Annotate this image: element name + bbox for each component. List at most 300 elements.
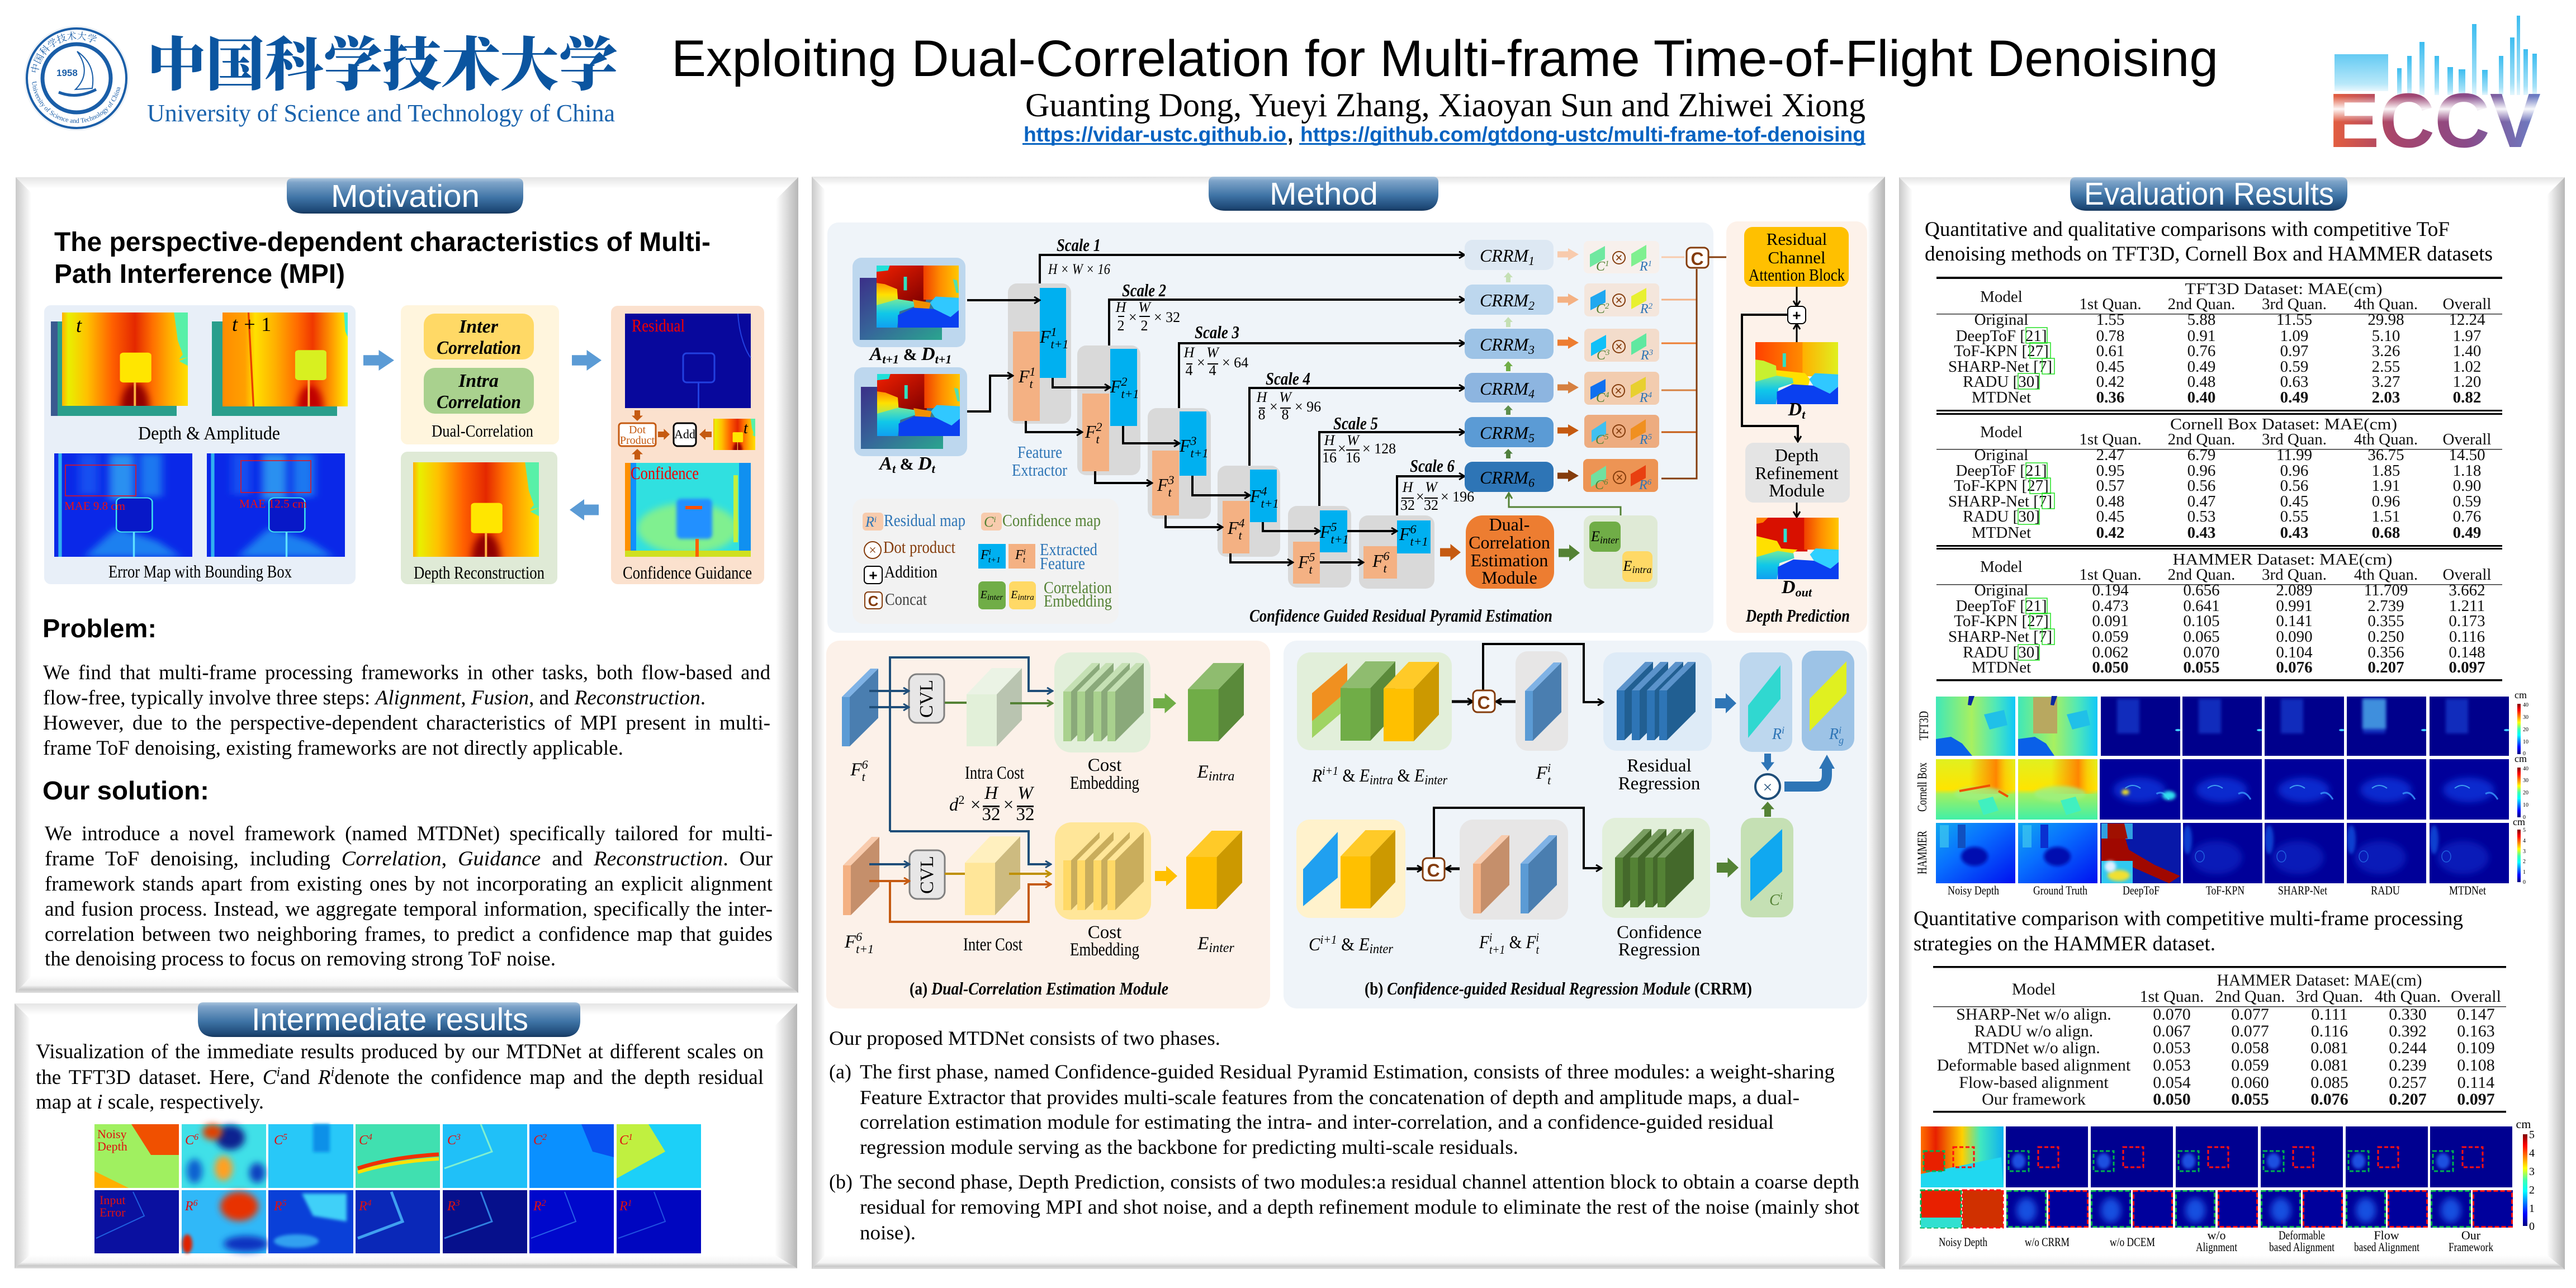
icon: university seal: 1958 [56, 68, 78, 78]
module labels: 6 [856, 930, 862, 944]
module labels [844, 755, 1234, 960]
heading: MPI: Path Interference (MPI) [54, 259, 345, 289]
module labels: t+1 [856, 942, 874, 956]
colorbars: 40 [2523, 702, 2528, 708]
map: noisy depth [94, 1124, 179, 1188]
confidence times residual maps: × [1615, 424, 1623, 439]
table: TFT3D: 1.97 [2453, 327, 2481, 345]
feature extractor pyramid: 5 [1309, 550, 1315, 564]
CRRM labels: F [1479, 932, 1490, 953]
sub-panel: dual-correlation [401, 305, 559, 444]
legend: Addition [884, 562, 937, 581]
table: Cornell Box: 14.50 [2449, 446, 2485, 464]
dimension labels: × 128 [1362, 441, 1396, 457]
input: frame t: t [892, 462, 896, 476]
legend: + [869, 567, 878, 584]
table: Cornell Box: Overall [2443, 430, 2491, 448]
dimension labels: W [1347, 432, 1360, 448]
table: HAMMER: 0.091 [2092, 612, 2129, 630]
arrow: curved to R_g [1784, 755, 1835, 787]
CRRM labels: i [1782, 724, 1784, 736]
map: C1 [617, 1124, 701, 1188]
map: R1 [617, 1190, 701, 1253]
map: noisy depth: Depth [97, 1139, 127, 1153]
legend: Dot product [883, 537, 955, 557]
feature extractor pyramid: 6 [1410, 522, 1417, 536]
map: C1: 1 [628, 1133, 633, 1142]
table: multi-frame strategies: Flow-based alignment [1959, 1073, 2109, 1092]
table: multi-frame strategies: 0.070 [2153, 1005, 2191, 1024]
inter branch [843, 831, 1242, 915]
module labels: Cost [1088, 755, 1121, 775]
map: C6: C [185, 1133, 194, 1148]
correlation embeddings [1509, 493, 1658, 589]
confidence times residual maps: C [1595, 433, 1604, 447]
table: Cornell Box: 0.48 [2096, 493, 2124, 510]
text block: evaluation intro: Quantitative and qualitative comparisons with competitive ToF [1925, 218, 2450, 241]
map: R5 [268, 1190, 353, 1253]
colorbar: 0 [2529, 1220, 2535, 1233]
CRRM labels [1309, 724, 1844, 960]
table: Cornell Box: 0.55 [2280, 508, 2308, 525]
table: TFT3D: RADU [30] [1963, 373, 2040, 391]
table: HAMMER: Overall [2443, 566, 2491, 584]
table: HAMMER: 2.739 [2367, 597, 2404, 615]
module connections [869, 657, 1053, 922]
module labels: × [965, 795, 982, 815]
labels: Noisy Depth [1939, 1235, 1987, 1249]
table: Cornell Box: 0.96 [2187, 462, 2215, 480]
table: HAMMER: 2.089 [2276, 581, 2313, 599]
map: C4 [356, 1124, 440, 1188]
feature extractor pyramid: F [1019, 366, 1030, 386]
dimension labels: 8 [1281, 406, 1289, 423]
sub-panel: confidence guidance: Confidence Guidance [623, 562, 752, 583]
scale labels: Scale 3 [1195, 322, 1239, 342]
residual branch blocks [1312, 661, 1846, 741]
table: multi-frame strategies: 0.085 [2310, 1073, 2348, 1092]
text block: problem: frame ToF denoising, existing frameworks are not directly applicable. [43, 737, 623, 760]
CRRM labels: i+1 [1322, 764, 1338, 778]
confidence times residual maps: 4 [1605, 391, 1609, 400]
logo: English university name: University of Science and Technology of China [147, 100, 615, 127]
sub-panel: dual-correlation: Inter [458, 316, 499, 337]
table: Cornell Box: MTDNet [1972, 524, 2031, 542]
input: frame t [854, 367, 967, 476]
table: multi-frame strategies: 0.081 [2310, 1056, 2348, 1074]
residual channel attention block: Channel [1768, 248, 1826, 267]
table: Cornell Box: 0.43 [2187, 524, 2215, 542]
depth refinement module: Module [1769, 480, 1825, 500]
feature extractor pyramid: 3 [1168, 473, 1175, 487]
table: Cornell Box: 0.76 [2453, 508, 2481, 525]
text block: intermediate description: map at i scale, respectively. [36, 1091, 264, 1114]
table: multi-frame strategies: 2nd Quan. [2215, 987, 2285, 1006]
table: HAMMER: ToF-KPN [27] [1954, 612, 2049, 630]
confidence times residual maps: 6 [1604, 478, 1608, 487]
CRRM stack: 1 [1528, 254, 1535, 268]
map: C1: C [619, 1133, 628, 1148]
correlation embeddings: E [1591, 528, 1600, 544]
text block: method description: residual for removing MPI and shot noise, and a depth refinement module to eliminate the rest of the noise (mainly shot [860, 1196, 1859, 1218]
dimension labels: W [1279, 389, 1292, 405]
module labels: Cost [1088, 922, 1121, 943]
text block: method description: (b) [829, 1171, 853, 1193]
legend: intra [1018, 593, 1034, 602]
module labels: Embedding [1070, 773, 1139, 793]
feature extractor pyramid: 1 [1030, 364, 1036, 378]
row: HAMMER [1915, 823, 2509, 883]
labels: based Alignment [2269, 1240, 2334, 1254]
table: HAMMER: 0.148 [2449, 643, 2485, 661]
module labels: 32 [982, 804, 1001, 825]
feature extractor pyramid: t+1 [1191, 446, 1209, 460]
confidence times residual maps: × [1615, 251, 1623, 266]
arrow [1559, 544, 1580, 561]
arrow [363, 350, 394, 371]
heading: problem: Problem: [42, 614, 157, 643]
sub-panel: dual-correlation: Correlation [437, 338, 521, 358]
text block: solution: and fusion process. Instead, we aggregate temporal information, specifically the inter- [45, 898, 773, 921]
arrow [1717, 858, 1739, 878]
table: Cornell Box: 1.18 [2453, 462, 2481, 480]
feature extractor pyramid: F [1157, 475, 1168, 495]
table: Cornell Box: 4th Quan. [2354, 430, 2418, 448]
correlation embeddings: E [1623, 558, 1632, 574]
map: R6: R [185, 1199, 193, 1214]
table: HAMMER: 0.207 [2367, 659, 2404, 676]
confidence times residual maps [1583, 241, 1659, 493]
column labels: SHARP-Net [2278, 883, 2327, 897]
table: multi-frame strategies: RADU w/o align. [1974, 1022, 2093, 1040]
map: R4: 4 [367, 1199, 372, 1208]
table: Cornell Box: 0.47 [2187, 493, 2215, 510]
legend: × [869, 543, 877, 558]
table: TFT3D: 29.98 [2367, 311, 2404, 329]
input: frame t+1: A [870, 344, 882, 364]
scale labels: Scale 5 [1333, 413, 1378, 433]
table: Cornell Box: Model [1980, 423, 2023, 441]
map: R6 [182, 1190, 268, 1253]
table: multi-frame strategies: 0.111 [2311, 1005, 2348, 1024]
table: TFT3D: 11.55 [2276, 311, 2312, 329]
table: HAMMER: 0.656 [2183, 581, 2220, 599]
feature extractor pyramid: Extractor [1012, 460, 1068, 480]
confidence times residual maps: 3 [1649, 348, 1653, 357]
figure: qualitative comparisons [1915, 689, 2528, 897]
arrow [1155, 866, 1177, 886]
figure: alignment comparison [1921, 1117, 2535, 1254]
CRRM labels: & [1338, 766, 1360, 786]
table: Cornell Box: 1.85 [2372, 462, 2400, 480]
table: multi-frame strategies: 0.053 [2153, 1039, 2191, 1057]
panel: evaluation results [1899, 176, 2565, 1270]
map: R5: 5 [282, 1199, 287, 1208]
dimension labels: 16 [1346, 449, 1360, 466]
table: TFT3D: 0.61 [2096, 342, 2124, 360]
table: HAMMER: 0.355 [2367, 612, 2404, 630]
confidence times residual maps: 3 [1605, 348, 1610, 357]
dimension labels: W [1425, 479, 1438, 495]
feature extractor pyramid: F [1372, 551, 1384, 571]
dimension labels: × [1338, 441, 1346, 457]
table: TFT3D: Overall [2443, 295, 2491, 313]
feature extractor pyramid: 3 [1190, 434, 1197, 448]
colorbars: 0 [2523, 815, 2526, 821]
figure: multi-scale maps [94, 1124, 701, 1253]
CRRM labels: i [1547, 761, 1551, 775]
table: HAMMER: 0.062 [2092, 643, 2129, 661]
map: noisy depth: Noisy [97, 1127, 127, 1141]
dimension labels: H [1324, 432, 1336, 448]
legend: C [984, 514, 993, 530]
table: HAMMER: 0.090 [2276, 628, 2313, 646]
map: C4: 4 [368, 1133, 372, 1142]
table: HAMMER: 0.070 [2183, 643, 2220, 661]
feature extractor pyramid: 1 [1051, 325, 1057, 339]
table: HAMMER: 0.116 [2449, 628, 2485, 646]
table: multi-frame strategies: 0.114 [2457, 1073, 2494, 1092]
confidence times residual maps: 1 [1648, 259, 1652, 268]
confidence times residual maps: R [1640, 302, 1649, 316]
table: TFT3D: 0.76 [2187, 342, 2215, 360]
table: TFT3D: 0.82 [2453, 389, 2481, 406]
table: TFT3D: 1.40 [2453, 342, 2481, 360]
dimension labels: × 196 [1441, 489, 1474, 505]
module labels: d [949, 795, 958, 815]
CRRM labels: R [1772, 726, 1782, 743]
module labels: E [1197, 762, 1209, 782]
table: multi-frame strategies: Deformable based alignment [1937, 1056, 2131, 1074]
feature extractor pyramid: t+1 [1121, 387, 1139, 401]
row: HAMMER: HAMMER [1915, 831, 1929, 874]
column labels: RADU [2371, 883, 2400, 897]
table: multi-frame strategies: SHARP-Net w/o align. [1956, 1005, 2111, 1024]
table: HAMMER: 1st Quan. [2079, 566, 2142, 584]
dimension labels: H [1402, 479, 1414, 495]
map: R2: 2 [542, 1199, 546, 1208]
sub-panel: confidence guidance [611, 306, 764, 584]
dimension labels: × 32 [1154, 309, 1180, 325]
map: input error: Error [100, 1205, 126, 1219]
map: R1: R [619, 1199, 628, 1214]
panel frame [1899, 177, 2565, 1270]
arrow [572, 350, 602, 371]
dimension labels: 8 [1258, 406, 1266, 423]
table: TFT3D: 0.36 [2096, 389, 2124, 406]
text block: intermediate description: denote the confidence map and the depth residual [334, 1066, 764, 1089]
feature extractor pyramid: Feature [1017, 442, 1062, 462]
CRRM labels: Residual [1627, 756, 1692, 776]
feature extractor pyramid: t [1096, 432, 1100, 446]
map: C5: C [274, 1133, 283, 1148]
colorbars: 20 [2523, 790, 2528, 796]
depth refinement module [1745, 443, 1850, 503]
dimension labels: 32 [1400, 497, 1415, 513]
sub-panel: confidence guidance: Product [620, 434, 655, 447]
table: TFT3D: 0.78 [2096, 327, 2124, 345]
map: R1: 1 [628, 1199, 632, 1208]
colorbars: 4 [2523, 838, 2526, 844]
colorbars: 10 [2523, 739, 2528, 745]
label: D_out: out [1796, 585, 1812, 599]
scale labels: Scale 1 [1057, 235, 1101, 255]
heading pill: Motivation: Motivation [331, 178, 480, 214]
links: , [1287, 123, 1293, 146]
table: Cornell Box: 0.53 [2187, 508, 2215, 525]
authors: Guanting Dong, Yueyi Zhang, Xiaoyan Sun and Zhiwei Xiong [1025, 87, 1865, 124]
labels: Framework [2449, 1240, 2493, 1254]
image: noisy depth with boxes [1921, 1126, 2004, 1187]
arrow [1761, 754, 1774, 771]
colorbar: cm [2516, 1117, 2531, 1131]
module labels: H [984, 783, 999, 803]
CRRM labels: g [1839, 735, 1844, 746]
concat arrows [1661, 257, 1744, 479]
table: Cornell Box: 0.49 [2453, 524, 2481, 542]
table: Cornell Box: Original [1974, 446, 2028, 464]
table: HAMMER: 0.991 [2276, 597, 2313, 615]
table: HAMMER: 0.173 [2449, 612, 2485, 630]
table: TFT3D: SHARP-Net [7] [1948, 358, 2052, 376]
label: D_t: D [1788, 399, 1802, 420]
table: HAMMER: SHARP-Net [7] [1948, 628, 2052, 646]
table: Cornell Box: 1st Quan. [2079, 430, 2142, 448]
legend: R [865, 514, 874, 530]
table: multi-frame strategies: Overall [2451, 987, 2501, 1006]
table: HAMMER: Original [1974, 581, 2028, 599]
confidence times residual maps: 2 [1649, 302, 1653, 311]
confidence times residual maps: 5 [1604, 433, 1609, 442]
table: HAMMER: 4th Quan. [2354, 566, 2418, 584]
text block: intermediate description: i [331, 1065, 334, 1079]
column labels: MTDNet [2449, 883, 2486, 897]
input: frame t+1 [853, 258, 965, 366]
legend: Embedding [1044, 591, 1112, 610]
arrow [1153, 693, 1176, 713]
dimension labels: 4 [1185, 362, 1193, 378]
CRRM labels: & [1393, 766, 1414, 786]
logo: Chinese university name: 中国科学技术大学 [147, 18, 618, 102]
dimension labels: × [1270, 399, 1278, 415]
heading pill: evaluation results: Evaluation Results [2084, 176, 2334, 212]
column labels: ToF-KPN [2206, 883, 2244, 897]
scale arrows [967, 255, 1465, 562]
feature extractor pyramid [1008, 283, 1434, 589]
CRRM stack: 4 [1528, 387, 1535, 401]
feature extractor pyramid: t [1384, 561, 1388, 575]
column labels: Ground Truth [2033, 883, 2087, 897]
icon: university seal [24, 26, 129, 131]
confidence times residual maps: × [1616, 471, 1623, 485]
table: TFT3D: ToF-KPN [27] [1954, 342, 2049, 360]
feature extractor pyramid: 4 [1239, 516, 1245, 530]
icon: university seal: 中国科学技术大学 [30, 31, 97, 73]
table: HAMMER: 0.194 [2092, 581, 2129, 599]
table: Cornell Box: 2.47 [2096, 446, 2124, 464]
map: R3: R [447, 1199, 456, 1214]
text block: problem: flow-free, typically involve three steps: Alignment, Fusion, and Reconstruction. [43, 686, 705, 709]
colorbars: 2 [2523, 859, 2526, 865]
table: multi-frame strategies: 0.077 [2231, 1022, 2269, 1040]
table: TFT3D: 3rd Quan. [2262, 295, 2327, 313]
caption (a): (a) Dual-Correlation Estimation Module [910, 978, 1168, 998]
labels: Our [2461, 1228, 2481, 1242]
dual-correlation estimation module: Module [1481, 567, 1537, 588]
text block: multi-frame comparison: strategies on the HAMMER dataset. [1914, 932, 2215, 955]
dimension labels: H × W × 16 [1048, 261, 1110, 277]
sub-panel: depth and amplitude, error map: MAE 12.5 cm [239, 497, 307, 510]
text block: intermediate description [36, 1040, 764, 1114]
CRRM labels: E [1359, 935, 1370, 955]
dimension labels [1048, 261, 1474, 513]
feature extractor pyramid: F [1228, 518, 1239, 538]
CRRM labels: & [1337, 935, 1359, 955]
table: multi-frame strategies: 0.116 [2311, 1022, 2348, 1040]
table: multi-frame strategies: 0.163 [2457, 1022, 2495, 1040]
table: multi-frame strategies: 0.109 [2457, 1039, 2495, 1057]
confidence times residual maps: C [1596, 302, 1605, 316]
sub-panel: dual-correlation: Dual-Correlation [432, 421, 533, 441]
map: R2: R [533, 1199, 542, 1214]
table: HAMMER: 11.709 [2364, 581, 2408, 599]
panel frame [812, 177, 1885, 1269]
confidence times residual maps: C [1596, 259, 1605, 274]
confidence branch blocks [1303, 829, 1782, 913]
map: C3: 3 [456, 1133, 461, 1142]
diagram: confidence guided residual pyramid estimation [827, 222, 1744, 633]
table: TFT3D [1936, 277, 2502, 415]
module labels: E [1197, 934, 1209, 954]
module labels: Embedding [1070, 940, 1139, 960]
caption: depth prediction: Depth Prediction [1745, 605, 1850, 626]
CRRM stack: CRRM [1480, 334, 1528, 354]
table: multi-frame strategies: 0.055 [2231, 1090, 2269, 1109]
dimension labels: × [1129, 309, 1137, 325]
colorbars [2513, 689, 2528, 886]
module labels: W [1017, 783, 1034, 803]
row: Cornell Box: Cornell Box [1915, 763, 1929, 812]
sub-panel: confidence guidance: Add [674, 427, 695, 441]
table: multi-frame strategies: 0.076 [2310, 1090, 2348, 1109]
icon: concat top: C [1477, 693, 1490, 713]
dual-correlation estimation module [1466, 514, 1554, 589]
diagram: depth prediction [1726, 221, 1867, 633]
module labels: Inter Cost [963, 935, 1022, 955]
map: C3: C [447, 1133, 456, 1148]
sub-panel: depth and amplitude, error map [44, 305, 356, 584]
zoomed crops [1921, 1190, 2513, 1228]
scale labels [1057, 235, 1455, 476]
labels: w/o DCEM [2110, 1235, 2155, 1249]
table: TFT3D: 0.45 [2096, 358, 2124, 376]
legend: Correlation [1044, 577, 1112, 597]
icon: concat [1687, 248, 1708, 269]
header: USTC logo [24, 18, 618, 131]
table: multi-frame strategies: 0.239 [2389, 1056, 2427, 1074]
dual-correlation estimation module: Dual- [1489, 514, 1530, 534]
icon: dot product: × [1763, 778, 1772, 797]
feature extractor pyramid: t [1168, 485, 1172, 499]
text block: method description: Our proposed MTDNet consists of two phases. [829, 1027, 1220, 1049]
module labels: F [850, 760, 862, 780]
feature extractor pyramid: t+1 [1051, 337, 1069, 351]
heading: our solution: Our solution: [42, 776, 209, 805]
table: TFT3D: MTDNet [1972, 389, 2031, 406]
map: C3 [443, 1124, 527, 1188]
input: frame t+1: D [921, 344, 935, 364]
sub-panel: confidence guidance: t [744, 420, 749, 437]
